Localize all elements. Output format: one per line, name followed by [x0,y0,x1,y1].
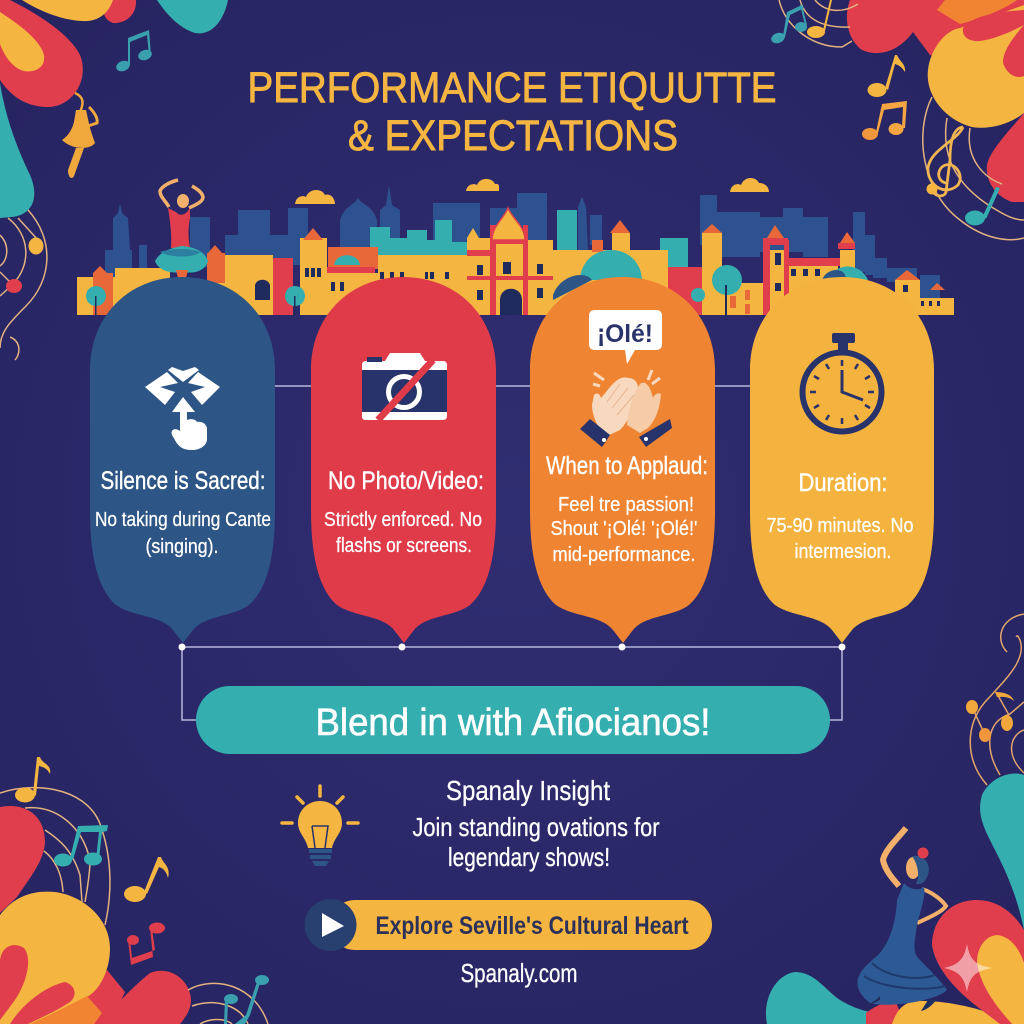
decoration: right staves and notes [966,614,1024,785]
skyline [77,178,954,315]
icon: ole speech bubble [589,310,662,364]
body text [766,515,914,563]
title: & EXPECTATIONS [348,112,678,160]
decoration: bottom-left music notes [15,757,269,1024]
insight text: Spanaly Insight [446,775,610,806]
body text [95,509,271,558]
call to action button [304,899,712,951]
skyline: front buildings [77,233,954,315]
body text: Shout '¡Olé! '¡Olé!' [550,518,698,540]
icon: light bulb [282,786,358,866]
icon: clapping hands [580,370,672,447]
panel: duration [750,277,934,643]
skyline: small cathedral tower [467,228,479,238]
decoration: left staff lines and notes [0,210,47,360]
icon: stopwatch [802,333,882,432]
skyline: back blue buildings [105,185,940,305]
body text: mid-performance. [552,544,696,566]
insight text: Join standing ovations for [412,812,660,842]
connector lines [182,386,842,720]
decoration: top-left music note [115,30,153,73]
decoration: top-right music notes [770,0,1000,226]
connector dots [178,644,846,650]
skyline: cathedral dome [492,208,525,240]
decoration: top-right blobs [847,0,1024,202]
body text [550,494,698,566]
title: PERFORMANCE ETIQUUTTE [248,64,776,112]
panel: silence is sacred [90,277,275,643]
body text: (singing). [146,536,218,558]
call to action button: Explore Seville's Cultural Heart [376,912,689,940]
body text: intermesion. [794,541,892,563]
decoration: bottom-right blobs [766,774,1024,1024]
footer url: Spanaly.com [460,958,578,988]
decoration: top-right staves [779,0,1024,240]
icon: treble clef [926,127,963,196]
body text: Strictly enforced. No [324,509,482,531]
body text [324,509,482,557]
decoration: top-left yellow dancer [62,93,97,178]
skyline: domes and trees [86,250,868,306]
decoration: bottom-left blobs [0,806,191,1024]
body text: 75-90 minutes. No [766,515,914,537]
icon: silence hand with arrows [145,367,220,450]
insight text [412,775,660,872]
decoration: clouds [295,178,769,204]
decoration: bottom-right flamenco dancer [858,828,947,1011]
decoration: bottom-left staves [0,788,268,1024]
heading: When to Applaud: [546,452,708,480]
panel: when to applaud [530,277,715,643]
icon: ole speech bubble: ¡Olé! [597,320,653,348]
icon: crossed-out camera [362,353,447,420]
body text: No taking during Cante [95,509,271,531]
panel: no photo/video [311,277,496,643]
heading: No Photo/Video: [328,467,484,495]
dancer on skyline [155,180,208,278]
decoration: top-left blobs [0,0,228,218]
insight text: legendary shows! [448,842,610,872]
body text: Feel tre passion! [558,494,694,516]
heading: Silence is Sacred: [100,467,266,495]
title [248,64,776,160]
heading: Duration: [798,469,888,497]
body text: flashs or screens. [336,535,472,557]
banner: blend in [196,686,830,754]
skyline: teal buildings [370,210,688,273]
banner: blend in: Blend in with Afiocianos! [316,702,710,744]
